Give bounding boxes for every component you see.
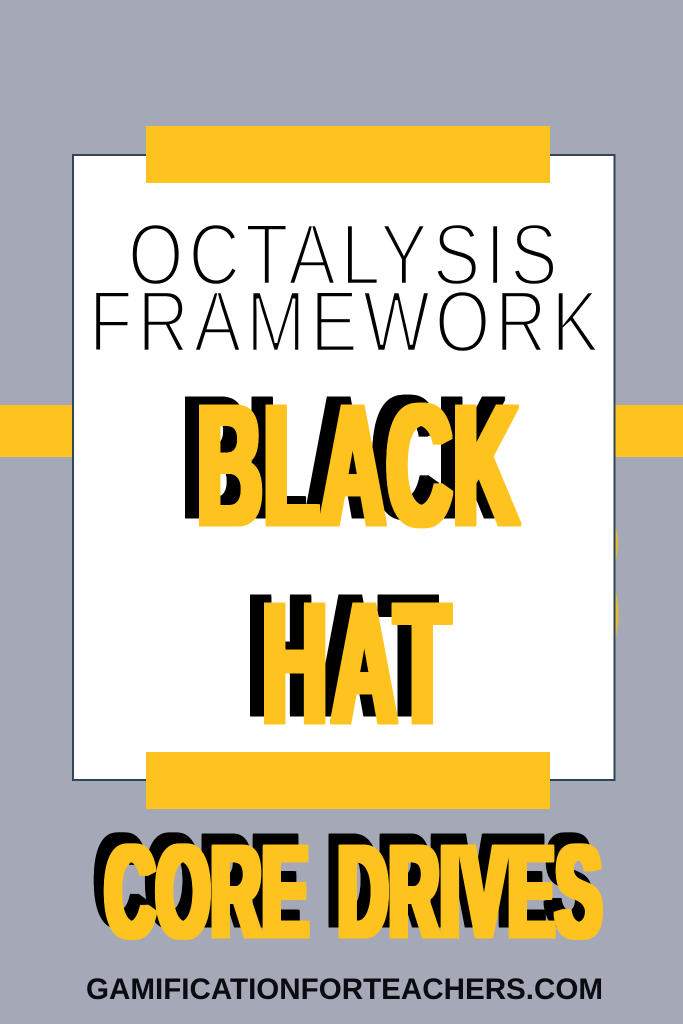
bottom yellow bar — [146, 752, 550, 809]
title word: BLACK: BLACK — [193, 368, 516, 562]
title word: BLACK: BLACK — [178, 360, 501, 554]
right side bar — [615, 405, 683, 457]
title word: HAT: HAT — [258, 566, 450, 760]
white framed panel — [73, 155, 614, 780]
top yellow bar — [146, 126, 550, 183]
heading: Octalysis Framework — [89, 206, 599, 370]
title words: CORE DRIVES: CORE DRIVES — [101, 818, 598, 965]
title words: CORE DRIVES: CORE DRIVES — [91, 807, 589, 954]
faint yellow arcs beside frame — [615, 525, 618, 640]
title word: HAT: HAT — [244, 558, 436, 752]
website url: GAMIFICATIONFORTEACHERS.COM — [86, 973, 603, 1006]
heading: Octalysis Framework: OCTALYSIS — [128, 206, 558, 303]
left side bar — [0, 405, 73, 457]
heading: Octalysis Framework: FRAMEWORK — [89, 273, 599, 370]
